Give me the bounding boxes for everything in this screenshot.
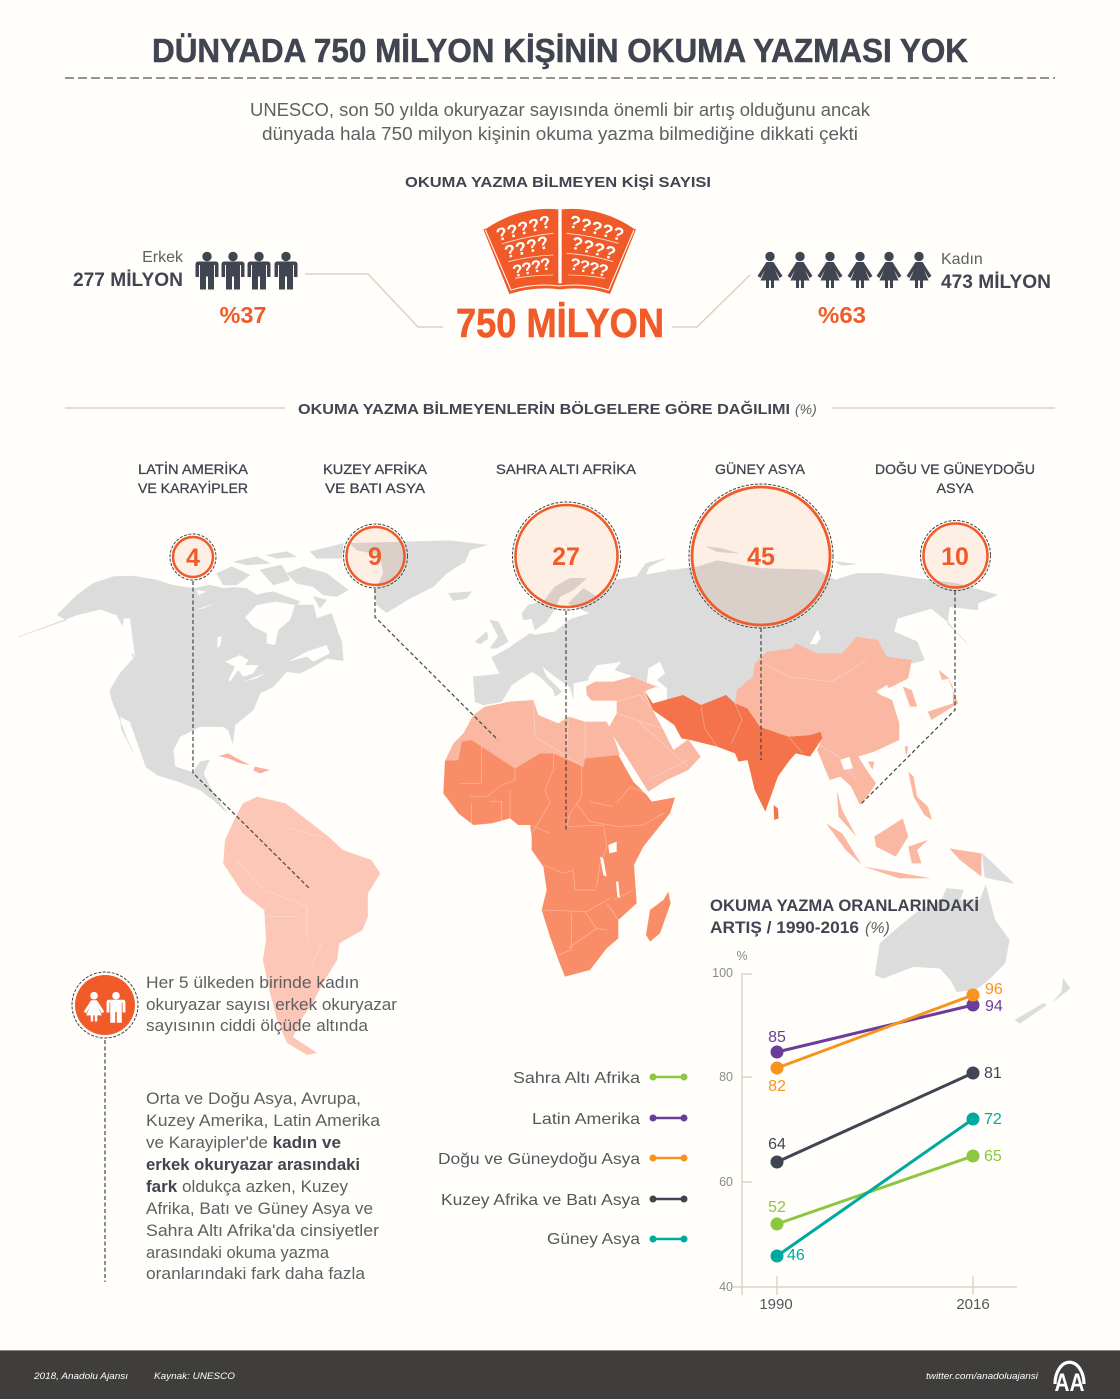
chart legend <box>438 1070 687 1248</box>
chart heading: ARTIŞ / 1990-2016 <box>710 918 859 937</box>
chart axes <box>733 974 1017 1295</box>
map: Africa <box>443 700 675 977</box>
dashed title rule <box>65 77 1055 79</box>
bubble: 4: 4 <box>186 544 200 572</box>
body text: gender gap by region: fark oldukça azken, Kuzey <box>146 1178 349 1196</box>
bubble: 9: 9 <box>368 543 382 571</box>
chart legend: Sahra Altı Afrika <box>513 1070 640 1087</box>
axis labels: % <box>736 949 748 963</box>
axis labels: 1990 <box>759 1296 793 1313</box>
region labels: KUZEY AFRİKA <box>323 460 428 477</box>
callout text: one in five countries: okuryazar sayısı erkek okuryazar <box>146 996 398 1014</box>
section heading: regional distribution: OKUMA YAZMA BİLMEYENLERİN BÖLGELERE GÖRE DAĞILIMI <box>298 400 790 418</box>
intro text: UNESCO, son 50 yılda okuryazar sayısında önemli bir artış olduğunu ancak <box>250 100 871 120</box>
footer credits: twitter.com/anadoluajansi <box>926 1371 1039 1382</box>
map: South America <box>223 797 380 1055</box>
series: South Asia: 72 <box>984 1111 1002 1128</box>
series: Latin America <box>768 998 1003 1058</box>
icon: open book with question marks: ???? <box>511 254 553 281</box>
region labels: ASYA <box>936 480 974 496</box>
male count: 277 MİLYON <box>73 270 183 291</box>
section heading: regional distribution: (%) <box>795 401 817 417</box>
icon: open book with question marks: ????? <box>494 211 553 245</box>
series: East and Southeast Asia <box>768 981 1003 1095</box>
chart heading: OKUMA YAZMA ORANLARINDAKİ <box>710 896 979 915</box>
title: DÜNYADA 750 MİLYON KİŞİNİN OKUMA YAZMASI YOK <box>152 32 968 69</box>
male count <box>73 249 184 291</box>
series: East and Southeast Asia: 96 <box>985 981 1003 998</box>
total: 750 million: 750 MİLYON <box>456 300 664 346</box>
connector: total to women <box>672 275 750 327</box>
leader lines <box>193 581 955 888</box>
icon: woman and man in orange circle <box>72 972 138 1038</box>
axis labels: 60 <box>719 1175 733 1189</box>
body text: gender gap by region: Kuzey Amerika, Latin Amerika <box>146 1112 381 1130</box>
heading: number of illiterate people: OKUMA YAZMA BİLMEYEN KİŞİ SAYISI <box>405 174 711 191</box>
series: East and Southeast Asia: 82 <box>768 1078 786 1095</box>
icon: open book with question marks: ???? <box>502 232 551 262</box>
icon: open book with question marks: ???? <box>568 254 610 281</box>
region labels <box>138 460 1035 496</box>
region labels: VE BATI ASYA <box>325 480 426 496</box>
female count <box>941 251 1051 293</box>
body text: gender gap by region: arasındaki okuma yazma <box>146 1244 330 1262</box>
series: South Asia: 46 <box>787 1247 805 1264</box>
icon: four men <box>196 252 298 290</box>
chart legend: Kuzey Afrika ve Batı Asya <box>441 1192 640 1209</box>
icon: open book with question marks: ???? <box>569 233 618 264</box>
axis labels <box>712 949 990 1313</box>
section heading: regional distribution <box>65 400 1055 418</box>
region labels: DOĞU VE GÜNEYDOĞU <box>875 460 1035 477</box>
chart heading: (%) <box>865 920 890 937</box>
footer credits: Kaynak: UNESCO <box>154 1371 236 1382</box>
body text: gender gap by region: Orta ve Doğu Asya, Avrupa, <box>146 1090 361 1108</box>
region labels: GÜNEY ASYA <box>715 460 806 477</box>
series: Latin America: 85 <box>768 1029 786 1046</box>
map: North America, Greenland and Caribbean <box>18 541 487 813</box>
series: South Asia <box>770 1111 1002 1264</box>
male count: Erkek <box>142 249 184 266</box>
footer credits <box>33 1371 1039 1382</box>
series: Sub-Saharan Africa: 65 <box>984 1148 1002 1165</box>
icon: Anadolu Agency logo <box>1054 1362 1084 1397</box>
footer credits: 2018, Anadolu Ajansı <box>33 1371 128 1382</box>
series: Latin America: 94 <box>985 998 1003 1015</box>
chart legend: Latin Amerika <box>532 1111 640 1128</box>
series: Sub-Saharan Africa: 52 <box>768 1199 786 1216</box>
line chart: literacy rates 1990-2016 <box>712 949 1017 1313</box>
region labels: LATİN AMERİKA <box>138 460 249 477</box>
body text: gender gap by region <box>146 1090 381 1283</box>
map: Australia and New Zealand <box>875 885 1070 1023</box>
bubble: 27 <box>512 502 620 610</box>
male percent: %37 <box>220 302 266 328</box>
footer bar <box>0 1350 1120 1399</box>
body text: gender gap by region: Afrika, Batı ve Güney Asya ve <box>146 1200 373 1218</box>
connector: men to total <box>305 274 443 327</box>
world map <box>18 541 1070 1055</box>
intro text: dünyada hala 750 milyon kişinin okuma yazma bilmediğine dikkati çekti <box>262 124 858 144</box>
chart heading <box>710 896 979 937</box>
callout text: one in five countries: Her 5 ülkeden birinde kadın <box>146 974 359 992</box>
callout text: one in five countries: sayısının ciddi ölçüde altında <box>146 1017 369 1035</box>
female count: Kadın <box>941 251 983 268</box>
intro text <box>250 100 871 144</box>
series: Sub-Saharan Africa <box>768 1148 1002 1230</box>
chart legend: Doğu ve Güneydoğu Asya <box>438 1151 640 1168</box>
axis labels: 2016 <box>956 1296 990 1313</box>
axis labels: 80 <box>719 1070 733 1084</box>
bubble: 10: 10 <box>941 543 969 571</box>
series: North Africa and West Asia <box>768 1065 1002 1168</box>
map: western Eurasia <box>473 561 740 792</box>
series: North Africa and West Asia: 81 <box>984 1065 1002 1082</box>
callout text: one in five countries <box>146 974 398 1035</box>
region labels: SAHRA ALTI AFRİKA <box>496 460 637 477</box>
bubble: 4 <box>170 534 216 580</box>
bubble: 45 <box>689 484 833 628</box>
bubble: 9 <box>344 524 408 588</box>
icon: six women <box>758 252 932 288</box>
icon: open book with question marks: ????? <box>567 211 626 245</box>
chart legend: Güney Asya <box>547 1231 640 1248</box>
female count: 473 MİLYON <box>941 272 1051 293</box>
series: North Africa and West Asia: 64 <box>768 1136 786 1153</box>
body text: gender gap by region: Sahra Altı Afrika'da cinsiyetler <box>146 1222 380 1240</box>
body text: gender gap by region: oranlarındaki fark daha fazla <box>146 1265 366 1283</box>
dashed vertical line <box>104 1040 106 1282</box>
female percent: %63 <box>818 302 866 328</box>
axis labels: 100 <box>712 966 733 980</box>
bubble: 45: 45 <box>747 543 775 571</box>
axis labels: 40 <box>719 1280 733 1294</box>
map: eastern Eurasia and Southeast Asia <box>637 547 1014 883</box>
bubble: 10 <box>920 520 990 590</box>
body text: gender gap by region: ve Karayipler'de kadın ve <box>146 1134 341 1152</box>
body text: gender gap by region: erkek okuryazar arasındaki <box>146 1156 360 1174</box>
icon: Anadolu Agency logo: AA <box>1054 1369 1084 1397</box>
bubble: 27: 27 <box>552 543 580 571</box>
icon: open book with question marks <box>483 208 636 294</box>
region labels: VE KARAYİPLER <box>138 479 248 496</box>
